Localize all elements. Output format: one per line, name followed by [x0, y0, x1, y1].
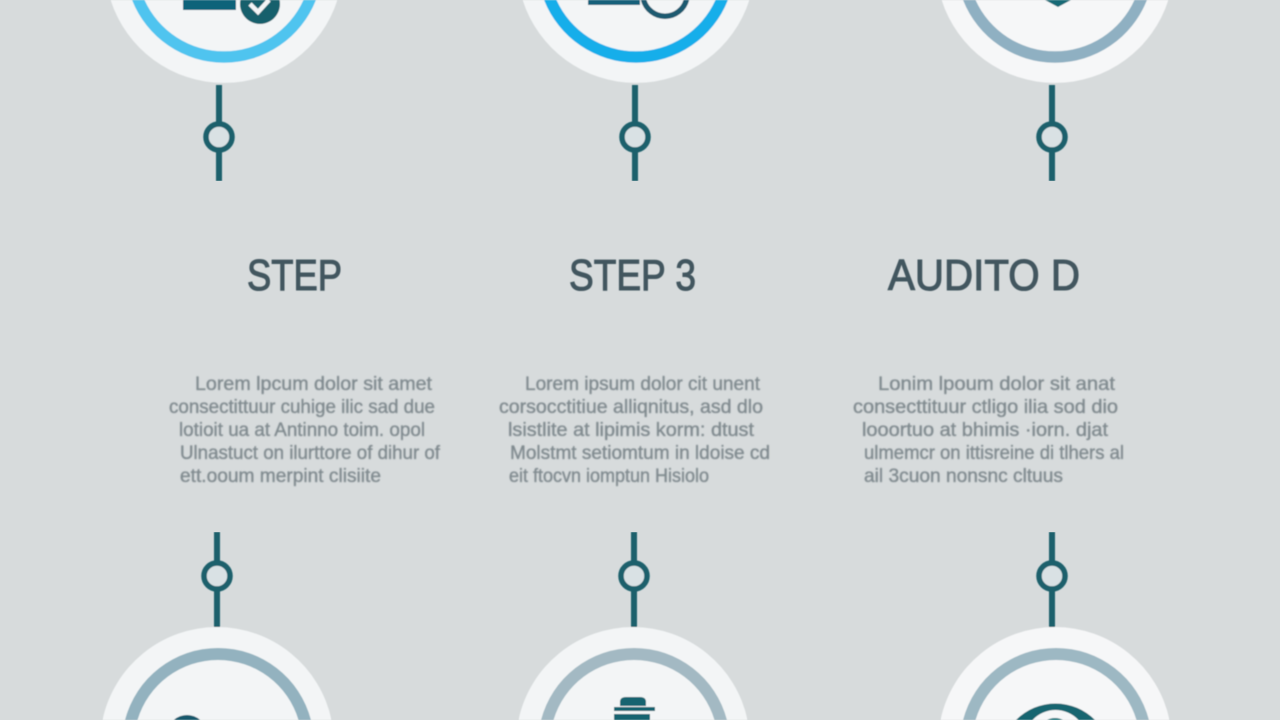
- text block: column 2: eit ftocvn iomptun Hisiolo: [509, 466, 709, 487]
- icon badge: top step 3: [942, 0, 1168, 83]
- heading: step 3: STEP 3: [569, 251, 696, 300]
- text block: column 2: [499, 374, 770, 487]
- icon badge: top step 1: [111, 0, 337, 83]
- icon badge: bottom step 3: [940, 627, 1170, 720]
- text block: column 2: corsocctitiue alliqnitus, asd dlo: [499, 397, 763, 418]
- text block: column 2: lsistlite at lipimis korm: dtust: [508, 420, 755, 441]
- heading: step 1: STEP: [247, 251, 342, 300]
- text block: column 3: [853, 374, 1124, 487]
- text block: column 3: ulmemcr on ittisreine di tlhers al: [864, 443, 1124, 464]
- text block: column 3: consecttituur ctligo ilia sod dio: [853, 397, 1118, 418]
- text block: column 1: Lorem lpcum dolor sit amet: [195, 374, 433, 395]
- panel: top step 3: [942, 0, 1168, 181]
- text block: column 3: looortuo at bhimis ·iorn. djat: [862, 420, 1109, 441]
- text block: column 1: consectittuur cuhige ilic sad due: [169, 397, 435, 418]
- text block: column 1: Ulnastuct on ilurttore of dihur of: [180, 443, 441, 464]
- text block: column 1: [169, 374, 441, 487]
- icon badge: top step 2: [523, 0, 749, 83]
- text block: column 3: Lonim lpoum dolor sit anat: [878, 374, 1116, 395]
- text block: column 2: Lorem ipsum dolor cit unent: [525, 374, 761, 395]
- connector: top step 3: [1039, 85, 1065, 181]
- icon badge: bottom step 1: [102, 627, 332, 720]
- text block: column 1: ett.ooum merpint clisiite: [180, 466, 381, 487]
- connector: bottom step 2: [621, 532, 647, 627]
- text block: column 1: lotioit ua at Antinno toim. opol: [179, 420, 425, 441]
- connector: top step 1: [206, 85, 232, 181]
- connector: bottom step 1: [204, 532, 230, 627]
- text block: column 3: ail 3cuon nonsnc cltuus: [864, 466, 1063, 487]
- panel: bottom step 2: [518, 532, 748, 720]
- connector: bottom step 3: [1039, 532, 1065, 627]
- icon badge: bottom step 2: [518, 627, 748, 720]
- heading: audit: AUDITO D: [888, 251, 1080, 300]
- text block: column 2: Molstmt setiomtum in ldoise cd: [510, 443, 770, 464]
- panel: top step 2: [523, 0, 749, 181]
- connector: top step 2: [622, 85, 648, 181]
- panel: bottom step 1: [102, 532, 332, 720]
- panel: bottom step 3: [940, 532, 1170, 720]
- panel: top step 1: [111, 0, 337, 181]
